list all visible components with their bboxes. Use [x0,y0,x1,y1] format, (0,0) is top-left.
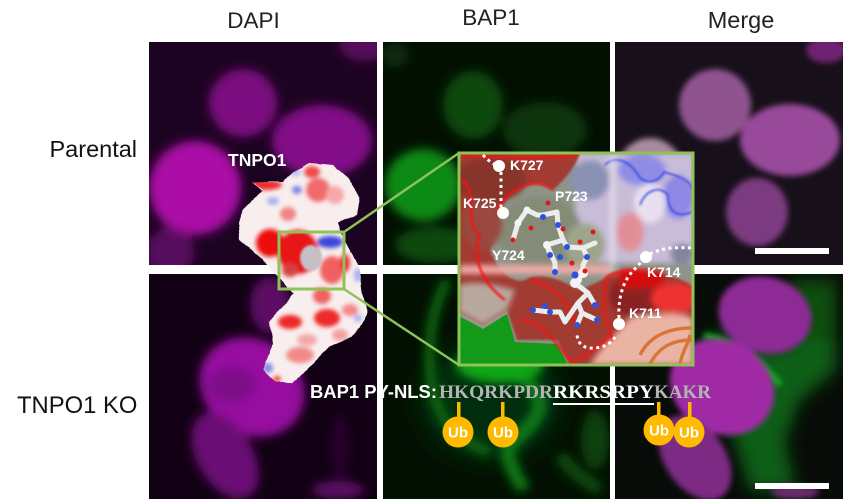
ubiquitin tag 3: Ub [649,422,669,440]
panel: TNPO1 KO Merge [615,266,843,504]
residue labels: K727 [510,157,544,173]
ubiquitin tag 2: Ub [493,424,513,442]
residue markers [493,160,652,330]
green background below surface [459,314,568,365]
zoom selection box [279,232,344,289]
sequence: BAP1 PY-NLS: BAP1 PY-NLS: [310,382,437,402]
residue labels: Y724 [492,247,525,263]
label: TNPO1: TNPO1 [228,150,287,170]
ubiquitin tag 4: Ub [679,424,699,442]
ubiquitin tag 2 [488,402,518,448]
sequence: BAP1 PY-NLS: HKQRKPDR [439,382,553,403]
sequence: BAP1 PY-NLS: RKRSRPY [553,382,654,403]
red negative surface [459,153,693,365]
ligand: peptide in pocket [300,245,322,271]
residue labels: K711 [629,305,662,321]
residue labels: K714 [647,264,681,280]
inset frame [459,153,693,365]
scale bar: top [755,248,829,254]
ubiquitin tag 4 [674,402,704,448]
inset: binding pocket close-up [454,153,699,365]
row label: Parental: Parental [50,136,137,162]
ubiquitin tag 3 [644,402,674,446]
column heading: BAP1: BAP1 [462,5,520,30]
pale and blue surface at right [498,153,695,268]
zoom connector lines [344,153,459,365]
column heading: Merge: Merge [708,7,774,33]
ubiquitin tag 1 [442,402,474,448]
residue labels: P723 [555,188,588,204]
sequence: BAP1 PY-NLS [310,382,711,405]
panel: Parental BAP1 [381,42,610,265]
row label: TNPO1 KO: TNPO1 KO [17,392,137,419]
peptide: ball-and-stick [513,210,597,325]
residue labels [463,157,681,321]
residue labels: K725 [463,195,497,211]
ubiquitin tag 1: Ub [448,424,468,442]
scale bar: bottom [755,483,829,489]
panel: Parental Merge [614,37,845,265]
column heading: DAPI: DAPI [227,8,280,33]
sequence: BAP1 PY-NLS: KAKR [654,382,711,403]
red rim highlights [460,155,655,363]
panel: TNPO1 KO DAPI [149,274,377,504]
panel: Parental DAPI [149,42,377,265]
dotted paths [483,155,693,348]
ribbons: orange helix [640,328,692,364]
panel: TNPO1 KO BAP1 [383,274,610,499]
molecule: TNPO1 surface [238,163,368,382]
